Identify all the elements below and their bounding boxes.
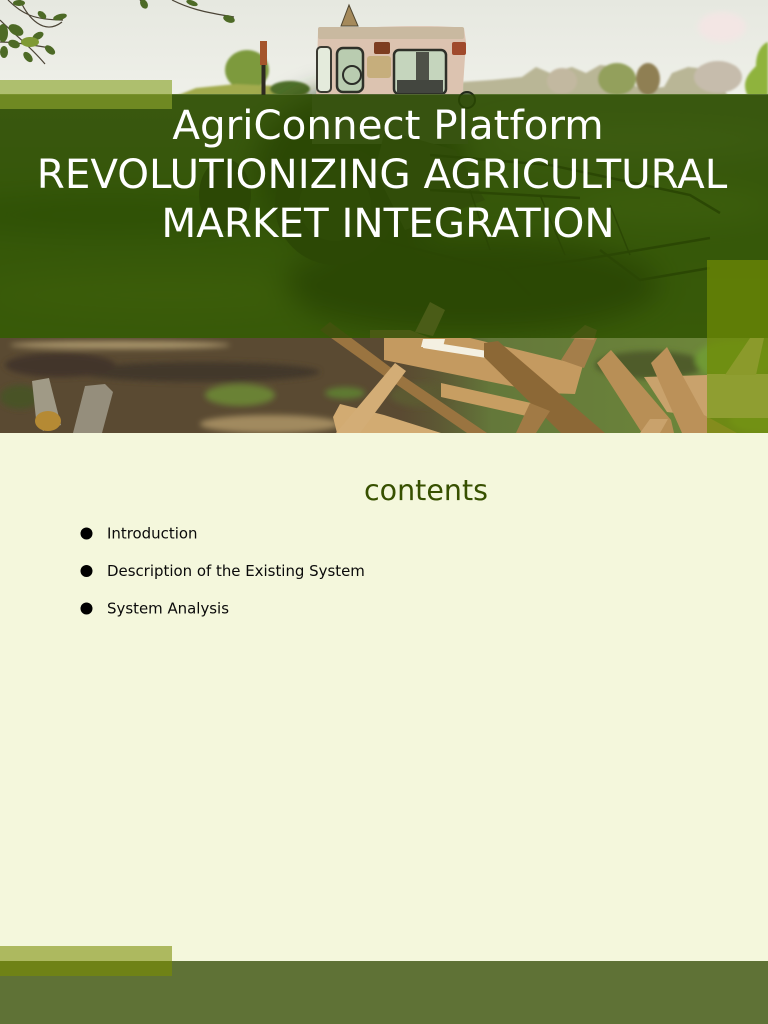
block heads rising into the band <box>415 302 445 336</box>
accent block: top left <box>0 80 172 109</box>
title: MARKET INTEGRATION <box>161 199 615 247</box>
right beam one <box>597 350 674 433</box>
roof beacon <box>341 5 358 26</box>
contents list <box>80 524 365 618</box>
list item: Description of the Existing System: Description of the Existing System <box>107 562 365 580</box>
accent block: bottom left dark <box>0 961 172 976</box>
title <box>37 101 728 247</box>
title: AgriConnect Platform <box>172 101 604 149</box>
background cross beam <box>441 383 531 417</box>
support leg <box>336 363 406 433</box>
lower left plank <box>333 404 441 433</box>
accent block: bottom left light <box>0 946 172 961</box>
cut logs <box>32 378 113 433</box>
cab <box>316 26 466 94</box>
list item: Introduction: Introduction <box>107 524 197 542</box>
list item: System Analysis: System Analysis <box>107 600 229 618</box>
soil ground <box>0 338 488 433</box>
far horizontal plank <box>644 375 707 417</box>
footer band <box>0 961 768 1024</box>
accent block: right edge <box>707 260 768 433</box>
right beam two <box>651 347 737 433</box>
body and wheels <box>312 94 468 144</box>
distant tree line <box>176 42 768 101</box>
exhaust pipe <box>260 41 267 65</box>
long plank <box>384 338 583 394</box>
harrow <box>463 156 720 279</box>
contents heading: contents <box>364 474 488 507</box>
dark green title band <box>0 94 768 338</box>
wooden sawhorse beams <box>320 302 768 433</box>
title: REVOLUTIONIZING AGRICULTURAL <box>37 150 728 198</box>
hero photo: tractor in a field <box>0 0 768 433</box>
sky <box>0 0 768 96</box>
main diagonal beam <box>484 341 605 433</box>
left diagonal beam <box>320 322 487 433</box>
tractor <box>199 5 720 295</box>
block behind plank <box>561 338 597 368</box>
far right plank and block <box>707 374 768 418</box>
field <box>0 94 768 340</box>
tree branches top left <box>0 0 234 64</box>
